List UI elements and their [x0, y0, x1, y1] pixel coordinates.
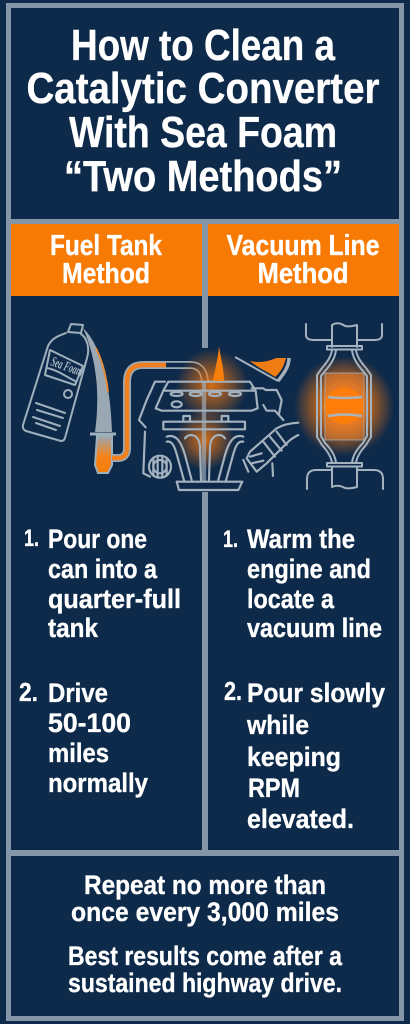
icon: catalytic converter	[294, 323, 394, 489]
step 1: tank	[48, 613, 99, 643]
step 1: quarter-full	[48, 584, 181, 614]
step 2: keeping	[247, 742, 341, 772]
icon: tube to engine	[112, 365, 205, 458]
step 1: vacuum line	[247, 613, 382, 643]
step 1: Pour one	[48, 524, 147, 554]
step 2: elevated.	[247, 804, 354, 834]
step 2: miles	[48, 738, 109, 768]
step 1: can into a	[48, 554, 158, 584]
step 2: 50-100	[48, 708, 131, 738]
step 2	[19, 677, 148, 798]
header: Vacuum Line Method: Method	[258, 258, 348, 290]
icon: Sea Foam can: Sea Foam	[49, 355, 85, 380]
footer note: Repeat no more than	[84, 870, 326, 900]
step 1: 1.	[223, 526, 238, 553]
title: “Two Methods”	[64, 152, 342, 201]
step 1: engine and	[247, 554, 371, 584]
title	[26, 21, 380, 201]
step 2: 2.	[19, 677, 38, 707]
header: Fuel Tank Method	[11, 224, 202, 296]
step 2: Drive	[48, 678, 108, 708]
footer note: once every 3,000 miles	[71, 897, 339, 927]
step 1: Warm the	[247, 524, 355, 554]
footer note: sustained highway drive.	[68, 968, 342, 998]
step 1	[24, 524, 181, 643]
step 2: while	[246, 710, 309, 740]
steps: fuel tank method	[19, 524, 181, 798]
step 2: normally	[48, 768, 148, 798]
icon: engine	[139, 382, 298, 490]
step 2: 2.	[224, 676, 242, 706]
header: Fuel Tank Method: Method	[62, 258, 150, 290]
header: Vacuum Line Method	[208, 224, 399, 296]
step 2: Pour slowly	[247, 678, 385, 708]
steps: vacuum line method	[223, 524, 385, 834]
engine glow	[175, 349, 248, 470]
title: With Sea Foam	[69, 108, 337, 157]
header: Vacuum Line Method: Vacuum Line	[226, 230, 380, 262]
step 1	[223, 524, 382, 643]
icon: pouring wedge	[235, 357, 289, 381]
step 2	[224, 676, 385, 834]
footer note: Best results come after a	[68, 941, 343, 971]
icon: orange pour spike	[213, 346, 224, 381]
title: How to Clean a	[71, 21, 335, 70]
step 2: RPM	[248, 773, 300, 803]
footer note	[68, 870, 343, 998]
step 1: 1.	[24, 525, 39, 552]
header: Fuel Tank Method: Fuel Tank	[50, 230, 163, 262]
step 1: locate a	[247, 584, 335, 614]
icon: Sea Foam can	[23, 324, 88, 441]
icon: foam stream and funnel	[83, 328, 116, 473]
